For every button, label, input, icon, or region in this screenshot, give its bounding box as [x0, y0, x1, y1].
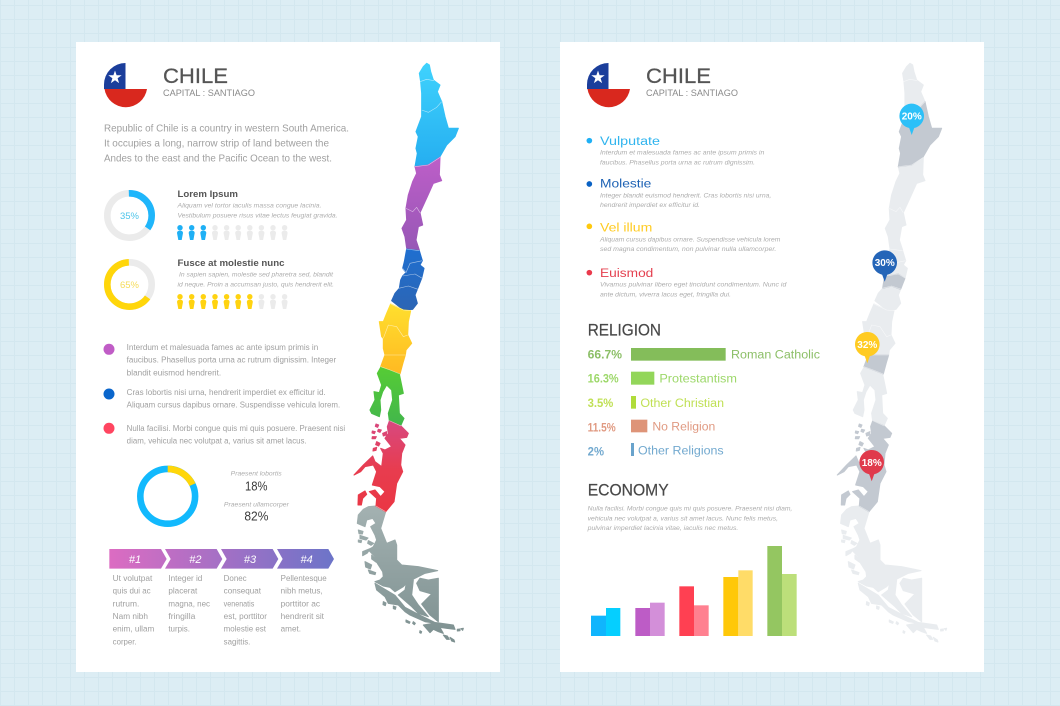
bullet list: diam, vehicula nec volutpat a, varius sit amet lacus.: [127, 437, 307, 446]
bullet list: Interdum et malesuada fames ac ante ipsum primis in: [127, 343, 318, 352]
map pin: 18%: 18%: [862, 458, 882, 469]
step descriptions: enim, ullam: [113, 625, 154, 634]
bar chart: religion: Protestantism: [659, 372, 737, 386]
bullet list: faucibus. Phasellus porta urna ac rutrum dignissim. Integer: [127, 356, 337, 365]
text block: Lorem Ipsum: Aliquam vel tortor iaculis massa congue lacinia.: [176, 202, 322, 210]
chevron process steps: #2: [189, 554, 201, 566]
step descriptions: consequat: [224, 587, 262, 596]
map pin: 18%: [859, 450, 884, 481]
key list: Vulputate, Molestie, Vel illum, Euismod: ante dictum, viverra lacus eget, fringilla dui.: [600, 291, 731, 298]
bar chart: religion: 16.3%: [588, 372, 619, 386]
donut legend: [224, 471, 290, 524]
title: CHILE: [163, 65, 228, 88]
map: Chile regions in grey: [837, 63, 947, 642]
step descriptions: Donec: [224, 574, 247, 583]
economy text: Nulla facilisi. Morbi congue quis mi quis posuere. Praesent nisi diam,: [588, 506, 793, 513]
step descriptions: sagittis.: [224, 637, 250, 646]
bullet list: Aliquam cursus dapibus ornare. Suspendisse vehicula lorem.: [127, 400, 340, 409]
key list: Vulputate, Molestie, Vel illum, Euismod: Aliquam cursus dapibus ornare. Suspendisse vehicula lorem: [599, 236, 781, 243]
bar chart: religion: No Religion: [652, 419, 715, 433]
title: CHILE: [646, 65, 711, 88]
bar chart: religion: 2%: [588, 445, 604, 459]
key list: Vulputate, Molestie, Vel illum, Euismod: hendrerit imperdiet ex efficitur id.: [600, 202, 700, 209]
bar chart: religion: 66.7%: [588, 347, 622, 361]
donut chart: 65%: [107, 262, 152, 307]
text block: Fusce at molestie nunc: In sapien sapien, molestie sed pharetra sed, blandit: [179, 272, 334, 278]
intro text: Republic of Chile is a country in western South America.: [104, 124, 349, 134]
bullet list: blandit euismod hendrerit.: [127, 368, 221, 377]
step descriptions: corper.: [113, 637, 137, 646]
text block: Lorem Ipsum: [176, 189, 338, 220]
map pin: 32%: [855, 332, 880, 363]
step descriptions: molestie est: [224, 625, 267, 634]
panel: left page: [76, 42, 500, 672]
step descriptions: fringilla: [168, 612, 196, 621]
key list: Vulputate, Molestie, Vel illum, Euismod: Molestie: [600, 177, 651, 191]
step descriptions: amet.: [281, 625, 301, 634]
economy text: [587, 506, 793, 532]
step descriptions: placerat: [168, 587, 198, 596]
intro text: [104, 124, 349, 164]
step descriptions: [113, 574, 327, 646]
intro text: It occupies a long, narrow strip of land between the: [104, 138, 329, 150]
step descriptions: nibh metus,: [281, 587, 323, 596]
key list: Vulputate, Molestie, Vel illum, Euismod: sed magna condimentum, non pulvinar nulla ullamcorper.: [600, 246, 776, 253]
chevron process steps: #1: [129, 554, 141, 566]
step descriptions: Integer id: [168, 574, 202, 583]
step descriptions: hendrerit sit: [281, 612, 325, 621]
bar chart: economy: [591, 546, 797, 636]
step descriptions: est, porttitor: [224, 612, 267, 621]
bar chart: religion: 3.5%: [588, 396, 613, 410]
donut legend: Praesent ullamcorper: [224, 502, 290, 508]
bullet list: Nulla facilisi. Morbi congue quis mi quis posuere. Praesent nisi: [127, 424, 345, 433]
donut legend: 82%: [244, 509, 269, 524]
icon: Chile flag: [587, 63, 630, 107]
panel: right page: [560, 42, 984, 672]
icon: Chile flag: [104, 63, 147, 107]
key list: Vulputate, Molestie, Vel illum, Euismod: Interdum et malesuada fames ac ante ipsum primis in: [600, 150, 765, 157]
text block: Lorem Ipsum: Lorem Ipsum: [178, 189, 238, 200]
chevron process steps: [109, 549, 334, 569]
step descriptions: rutrum.: [113, 599, 139, 608]
map pin: 20%: [899, 104, 924, 135]
donut chart: 35%: 35%: [120, 211, 140, 222]
bullet list: [104, 343, 345, 446]
chevron process steps: #3: [244, 554, 257, 566]
bar chart: religion: 11.5%: [588, 420, 616, 434]
bar chart: religion: [588, 347, 820, 459]
heading: economy: ECONOMY: [588, 480, 669, 499]
text block: Fusce at molestie nunc: id neque. Proin a accumsan justo, quis hendrerit elit.: [178, 282, 334, 288]
map pin: 32%: 32%: [857, 340, 877, 351]
economy text: pulvinar imperdiet lacinia vitae, iaculis nec metus.: [587, 525, 738, 532]
key list: Vulputate, Molestie, Vel illum, Euismod: Integer blandit euismod hendrerit. Cras lobortis nisi urna,: [600, 192, 772, 199]
donut chart: 18% / 82%: [140, 469, 195, 524]
step descriptions: magna, nec: [168, 599, 210, 608]
map pin: 20%: 20%: [902, 112, 922, 122]
step descriptions: venenatis: [224, 599, 254, 608]
step descriptions: porttitor ac: [281, 599, 320, 608]
key list: Vulputate, Molestie, Vel illum, Euismod: Vivamus pulvinar libero eget tincidunt condimentum. Nunc id: [600, 282, 787, 289]
bar chart: religion: Other Christian: [640, 396, 724, 410]
text block: Fusce at molestie nunc: [178, 258, 334, 288]
step descriptions: Nam nibh: [113, 612, 148, 621]
pictogram row: 3 of 10: [177, 225, 288, 240]
bullet list: Cras lobortis nisi urna, hendrerit imperdiet ex efficitur id.: [127, 388, 326, 397]
donut legend: Praesent lobortis: [231, 471, 282, 478]
key list: Vulputate, Molestie, Vel illum, Euismod: Euismod: [600, 266, 653, 280]
key list: Vulputate, Molestie, Vel illum, Euismod: Vel illum: [600, 220, 652, 234]
step descriptions: quis dui ac: [113, 587, 151, 596]
subtitle: CAPITAL : SANTIAGO: [163, 88, 255, 99]
map: Chile regions in colour: [354, 63, 463, 642]
key list: Vulputate, Molestie, Vel illum, Euismod: faucibus. Phasellus porta urna ac rutrum dignissim.: [600, 159, 755, 166]
pictogram row: 7 of 10: [177, 294, 288, 309]
step descriptions: Ut volutpat: [113, 574, 153, 583]
donut chart: 35%: [107, 193, 152, 238]
map pin: 30%: 30%: [875, 258, 895, 269]
step descriptions: Pellentesque: [281, 574, 327, 583]
map pin: 30%: [872, 250, 897, 282]
intro text: Andes to the east and the Pacific Ocean to the west.: [104, 154, 332, 164]
chevron process steps: #4: [301, 554, 313, 566]
subtitle: CAPITAL : SANTIAGO: [646, 88, 738, 99]
bar chart: religion: Other Religions: [638, 443, 724, 457]
economy text: vehicula nec volutpat a, varius sit amet lacus. Nunc felis metus,: [588, 515, 778, 522]
heading: religion: RELIGION: [588, 320, 661, 339]
key list: Vulputate, Molestie, Vel illum, Euismod: Vulputate: [600, 134, 660, 148]
key list: Vulputate, Molestie, Vel illum, Euismod: [586, 134, 787, 298]
text block: Lorem Ipsum: Vestibulum posuere risus vitae lectus feugiat gravida.: [178, 212, 338, 220]
step descriptions: turpis.: [168, 625, 190, 634]
text block: Fusce at molestie nunc: Fusce at molestie nunc: [178, 258, 284, 269]
donut legend: 18%: [245, 479, 268, 494]
bar chart: religion: Roman Catholic: [731, 347, 820, 361]
donut chart: 65%: 65%: [120, 280, 140, 291]
